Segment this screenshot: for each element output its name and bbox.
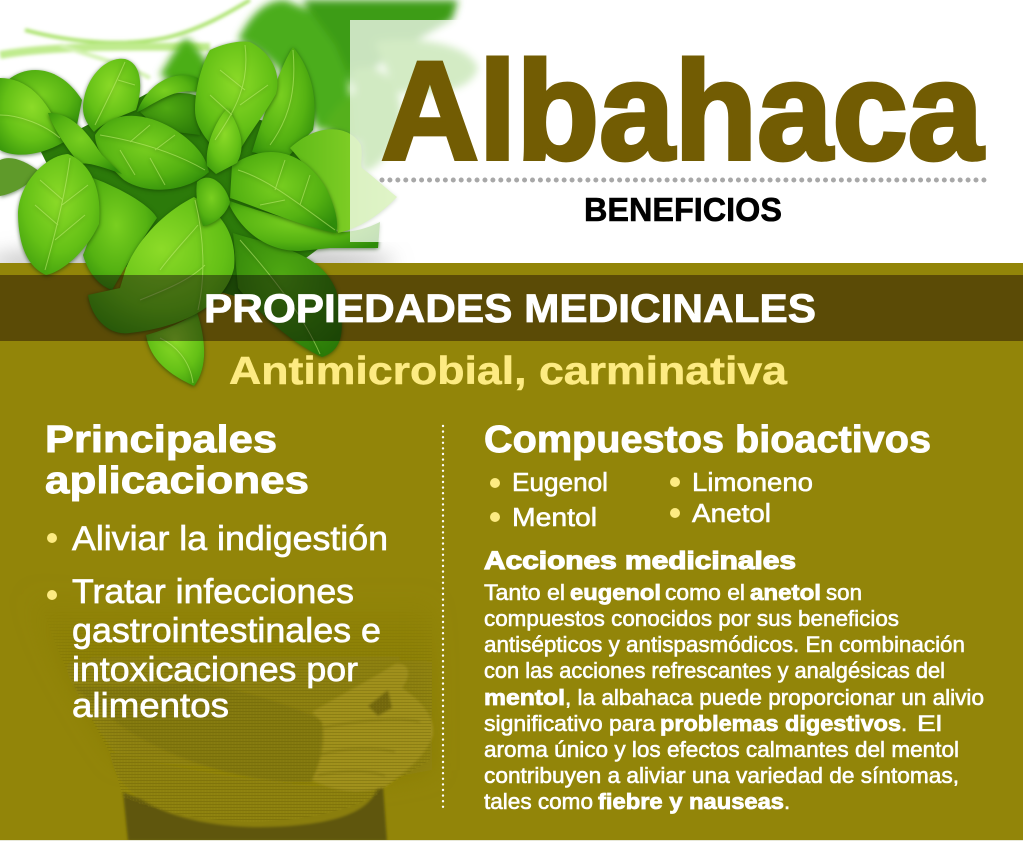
basil bunch xyxy=(0,41,397,386)
text block: acciones medicinales: como el xyxy=(665,580,745,605)
vertical dotted divider xyxy=(442,426,444,808)
dotted rule under title xyxy=(382,178,984,182)
bullet: aliviar: Aliviar la indigestión xyxy=(72,520,388,558)
bullet: tratar xyxy=(47,573,381,725)
leaf: right upper xyxy=(252,47,315,160)
stem xyxy=(0,158,40,196)
text block: acciones medicinales: El xyxy=(917,711,942,736)
heading: principales aplicaciones: Principales xyxy=(45,419,277,461)
leaf: back left xyxy=(8,70,82,130)
heading: compuestos bioactivos: Compuestos bioactivos xyxy=(484,419,931,461)
text block: acciones medicinales: compuestos conocidos por sus beneficios xyxy=(484,606,899,631)
hand xyxy=(312,664,433,791)
text block: acciones medicinales: tales como xyxy=(484,789,593,814)
compound list: Mentol xyxy=(512,502,597,532)
text block: acciones medicinales: fiebre y nauseas xyxy=(598,789,784,814)
olive background panel xyxy=(0,263,1023,841)
torso xyxy=(25,590,432,780)
text block: acciones medicinales: mentol xyxy=(484,685,565,710)
blurred stems xyxy=(0,0,250,78)
leaf: right lower long xyxy=(227,200,380,251)
leaf: dark under curl xyxy=(140,93,200,135)
dark interior xyxy=(40,92,330,300)
text block: acciones medicinales: , la albahaca puede proporcionar un alivio xyxy=(565,685,984,710)
band heading: PROPIEDADES MEDICINALES xyxy=(204,287,816,331)
panel: compuestos bioactivos xyxy=(484,419,984,814)
leaf: top centre-left xyxy=(83,59,140,132)
blurred background basil leaves xyxy=(160,0,478,172)
photo: hands holding stomach xyxy=(54,630,433,840)
leaf: bottom tip xyxy=(146,312,204,386)
bullet: tratar: intoxicaciones por xyxy=(72,651,358,689)
leaf: far left xyxy=(0,78,64,155)
compound list: Limoneno xyxy=(692,467,813,497)
title: Albahaca xyxy=(381,32,984,189)
text block: acciones medicinales xyxy=(484,580,984,814)
dark band xyxy=(0,275,1023,341)
heading: principales aplicaciones xyxy=(45,419,309,502)
text block: acciones medicinales: son xyxy=(826,580,862,605)
text block: acciones medicinales: con las acciones refrescantes y analgésicas del xyxy=(484,658,945,683)
bullet: tratar: gastrointestinales e xyxy=(72,612,381,650)
text block: acciones medicinales: antisépticos y antispasmódicos. En combinación xyxy=(484,632,965,657)
text block: acciones medicinales: contribuyen a aliviar una variedad de síntomas, xyxy=(484,763,959,788)
text block: acciones medicinales: . xyxy=(901,711,907,736)
leaf: centre-left xyxy=(95,116,209,190)
ground shadow under the basil xyxy=(0,246,395,278)
background: white header xyxy=(0,0,1023,263)
leaf: small curled xyxy=(137,75,198,112)
text block: acciones medicinales: aroma único y los efectos calmantes del mentol xyxy=(484,737,959,762)
compound list: Anetol xyxy=(692,498,771,528)
text block: acciones medicinales: . xyxy=(784,789,790,814)
text block: acciones medicinales: significativo para xyxy=(484,711,656,736)
subtitle: BENEFICIOS xyxy=(584,191,782,228)
leaf: behind lower left xyxy=(83,178,157,290)
bullet: tratar: Tratar infecciones xyxy=(72,573,354,611)
leaf: small upper left xyxy=(48,113,122,174)
panel: principales aplicaciones xyxy=(45,419,388,725)
compound list xyxy=(490,467,813,532)
bullet: tratar: alimentos xyxy=(72,687,229,725)
leaf: top centre big xyxy=(195,41,278,150)
text block: acciones medicinales: anetol xyxy=(750,580,821,605)
leaf: small upper centre xyxy=(207,108,242,174)
leaf: lower left xyxy=(18,154,100,275)
leaf: centre right xyxy=(230,152,337,233)
heading: principales aplicaciones: aplicaciones xyxy=(45,460,309,502)
hem xyxy=(110,752,377,827)
sleeve xyxy=(73,683,322,782)
leaf: lower right xyxy=(233,233,342,357)
text block: acciones medicinales: Tanto el xyxy=(484,580,565,605)
leaf: right translucent tip xyxy=(290,129,397,233)
translucent white title panel xyxy=(350,20,1023,242)
veins xyxy=(0,45,335,383)
jeans xyxy=(123,785,387,841)
properties subheading: Antimicrobial, carminativa xyxy=(229,350,787,393)
compound list: Eugenol xyxy=(512,467,608,497)
text block: acciones medicinales: problemas digestivos xyxy=(660,711,901,736)
leaf: lower big xyxy=(88,197,234,333)
heading: acciones medicinales: Acciones medicinales xyxy=(484,547,796,575)
text block: acciones medicinales: eugenol xyxy=(570,580,661,605)
leaf: small centre xyxy=(196,178,230,226)
